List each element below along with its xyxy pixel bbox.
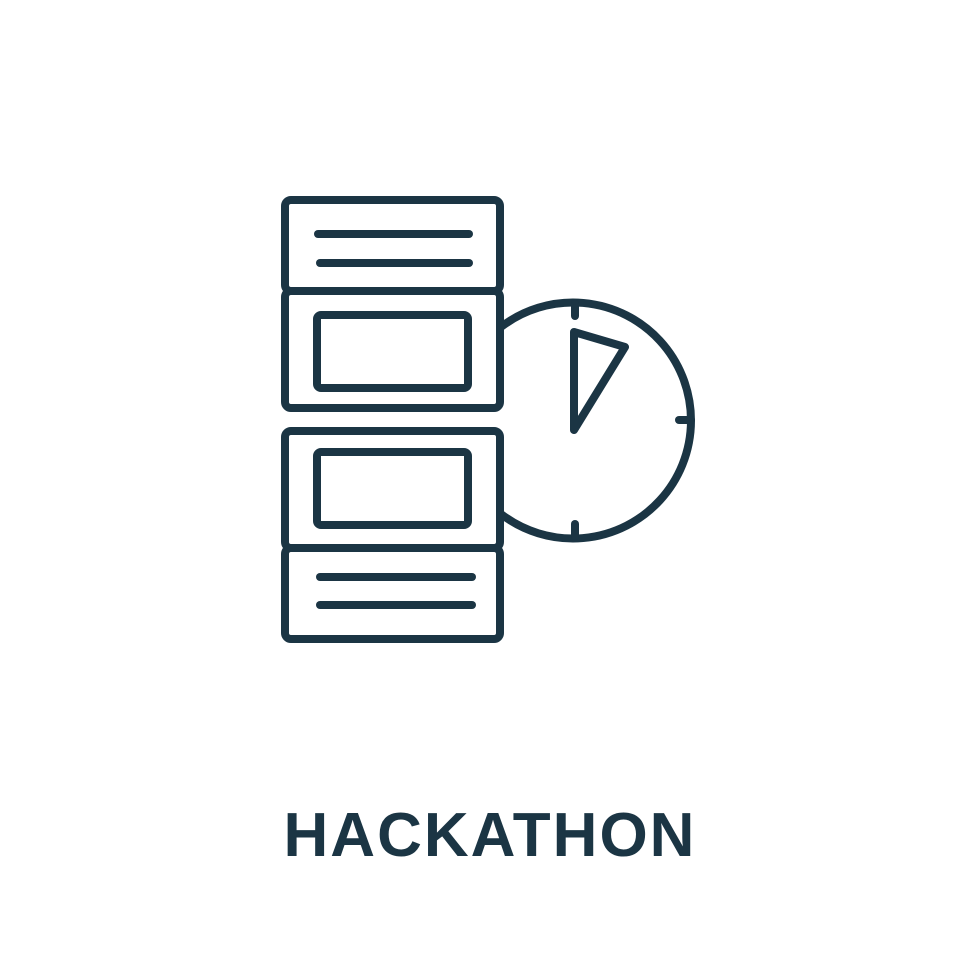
icon: top card with lines <box>285 200 500 291</box>
icon: bottom card with lines <box>285 548 500 639</box>
title: HACKATHON <box>284 801 696 870</box>
icon: clock <box>501 303 691 538</box>
icon: second card with frame <box>285 291 500 408</box>
icon: third card with frame <box>285 431 500 548</box>
